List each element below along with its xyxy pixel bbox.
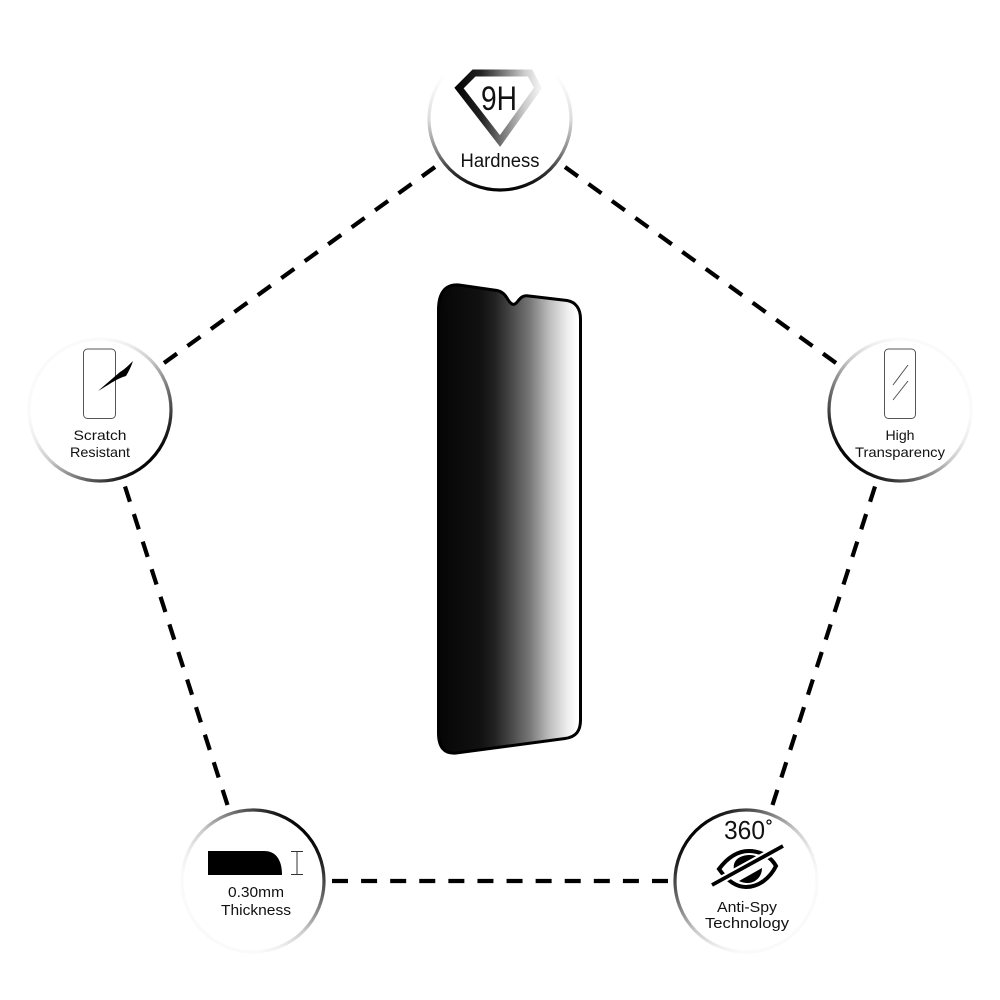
dashed pentagon connectors xyxy=(125,167,875,881)
label: Scratch Resistant xyxy=(70,427,130,460)
ring: high transparency xyxy=(829,339,971,481)
ring: hardness xyxy=(429,48,571,190)
icon: diamond xyxy=(459,73,538,141)
badge: thickness xyxy=(182,810,324,952)
label: 9H: 9H xyxy=(481,80,517,118)
label: Hardness: Hardness xyxy=(460,151,540,172)
badge: 9H hardness xyxy=(429,48,571,190)
label: High Transparency xyxy=(855,427,945,460)
label: Scratch Resistant: Resistant xyxy=(70,444,130,460)
label: 0.30mm Thickness: 0.30mm xyxy=(228,884,284,901)
ring: scratch resistant xyxy=(29,339,171,481)
label: Anti-Spy Technology xyxy=(705,899,790,932)
badge: anti-spy technology xyxy=(675,810,817,952)
label: 0.30mm Thickness: Thickness xyxy=(221,902,291,919)
phone screen protector xyxy=(438,285,580,753)
label: High Transparency: Transparency xyxy=(855,444,945,460)
label: 0.30mm Thickness xyxy=(221,884,291,919)
label: Scratch Resistant: Scratch xyxy=(74,427,126,443)
icon: crossed-out eye xyxy=(712,846,783,887)
label: Anti-Spy Technology: Anti-Spy xyxy=(717,899,778,916)
badge: scratch resistant xyxy=(29,339,171,481)
ring: anti-spy xyxy=(675,810,817,952)
ring: thickness xyxy=(182,810,324,952)
icon: glass edge profile xyxy=(208,851,282,875)
icon: thickness marker xyxy=(291,852,303,874)
label: High Transparency: High xyxy=(886,427,914,443)
icon: phone outline with glass glints xyxy=(884,349,916,418)
badge: high transparency xyxy=(829,339,971,481)
label: Anti-Spy Technology: Technology xyxy=(705,915,790,932)
icon: phone outline with scratch xyxy=(84,349,133,418)
label: 360 degrees: 360 xyxy=(724,815,765,845)
